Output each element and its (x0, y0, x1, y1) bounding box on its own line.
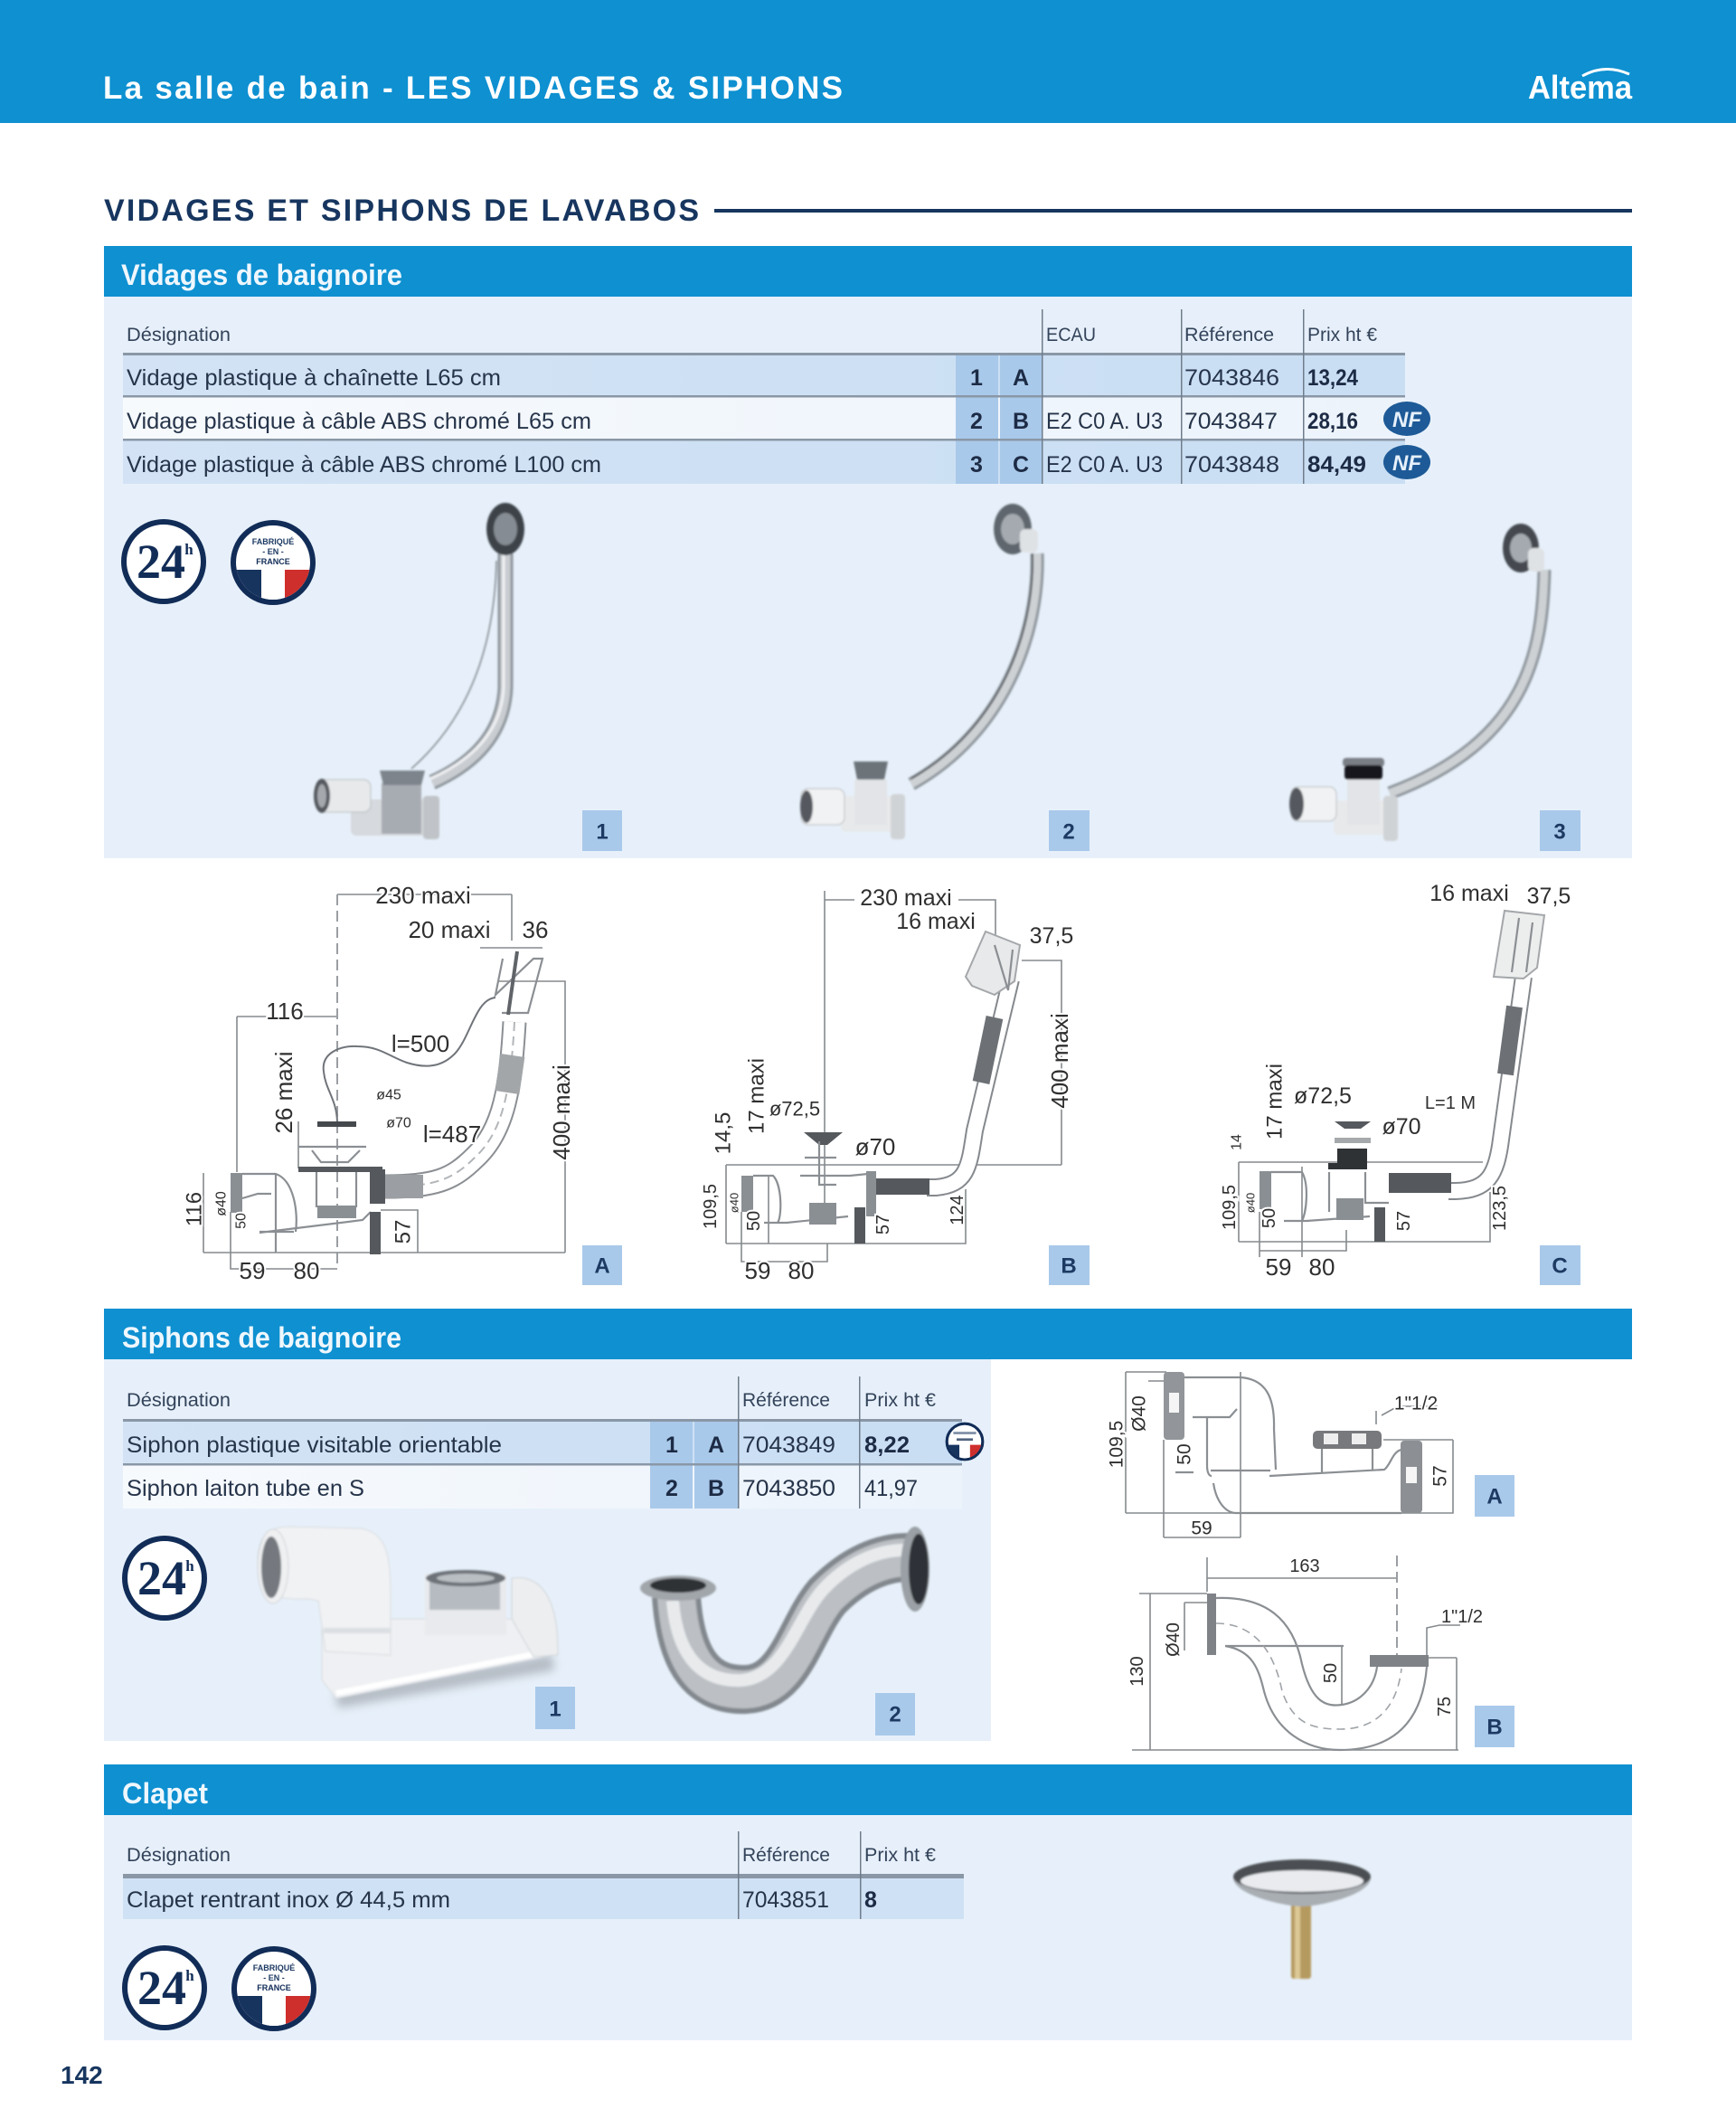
label 2 (1049, 810, 1090, 851)
dimensions siphon B: 1"1/2 (1441, 1607, 1483, 1627)
dimensions siphon B: 130 (1127, 1656, 1147, 1687)
icon: 24h delivery (125, 1948, 204, 2028)
table: siphons: Prix ht € (864, 1390, 936, 1411)
icon: NF mark: NF (1392, 408, 1422, 432)
table: siphons: B (708, 1476, 724, 1501)
dimensions C: L=1 M (1425, 1093, 1476, 1113)
label B (1475, 1706, 1514, 1747)
icon: 24h delivery: h (185, 1557, 194, 1575)
label A: A (594, 1253, 610, 1279)
label 3: 3 (1553, 819, 1566, 845)
table: clapet: Clapet rentrant inox Ø 44,5 mm (127, 1887, 450, 1913)
table: siphons: 7043849 (742, 1433, 835, 1458)
dimensions A: l=487 (423, 1121, 481, 1148)
product photo 2: vidage à câble L65 (800, 504, 1038, 839)
label C (1540, 1245, 1580, 1285)
table: vidages: 7043846 (1184, 365, 1279, 391)
icon: 24h delivery: 24 (137, 1551, 186, 1605)
product photo 3: vidage à câble L100 (1289, 524, 1544, 841)
label B (1049, 1245, 1090, 1285)
dimensions siphon B: 75 (1435, 1697, 1455, 1717)
dimensions siphon A: 1"1/2 (1394, 1393, 1438, 1414)
table: vidages: Vidage plastique à câble ABS chromé L65 cm (127, 409, 591, 434)
dimensions siphon B: 163 (1289, 1556, 1320, 1576)
dimensions A: ø40 (213, 1191, 230, 1216)
table: vidages: C (1013, 452, 1029, 478)
icon: fabriqué en France: - EN - (263, 1973, 285, 1982)
panel: siphons de baignoire (104, 1309, 1632, 1741)
dimensions siphon A: 57 (1430, 1465, 1450, 1487)
table: siphons: Siphon plastique visitable orientable (127, 1433, 502, 1458)
icon: small fabriqué en France (947, 1423, 983, 1460)
table: vidages: Vidage plastique à chaînette L65 cm (127, 365, 501, 391)
label C: C (1552, 1253, 1568, 1279)
icon: 24h delivery: 24 (137, 534, 185, 589)
technical drawing C (1220, 881, 1580, 1285)
panel heading: Vidages de baignoire (121, 259, 402, 291)
dimensions A: 57 (391, 1220, 416, 1244)
panel heading: Clapet (122, 1777, 208, 1810)
dimensions A: 36 (523, 916, 548, 943)
icon: fabriqué en France: FRANCE (257, 1983, 291, 1992)
dimensions B: ø40 (727, 1193, 741, 1213)
table: clapet: 7043851 (742, 1887, 829, 1913)
dimensions siphon A: 59 (1191, 1518, 1212, 1539)
product photo: siphon plastique (258, 1527, 558, 1700)
dimensions B: 16 maxi (896, 909, 976, 934)
table: siphons: 7043850 (742, 1476, 835, 1501)
panel: clapet (104, 1764, 1632, 2040)
product photo 1: vidage à chaînette (314, 503, 524, 839)
dimensions siphon A (1107, 1393, 1450, 1539)
page number: 142 (61, 2061, 103, 2089)
label A: A (1486, 1485, 1503, 1509)
table: siphons: Référence (742, 1390, 830, 1411)
dimensions B: 400 maxi (1046, 1013, 1073, 1109)
table: siphons: Désignation (127, 1390, 231, 1411)
header title: La salle de bain - LES VIDAGES & SIPHONS (103, 71, 843, 106)
label B: B (1486, 1715, 1503, 1740)
icon: NF mark (1383, 402, 1430, 436)
table: vidages: ECAU (1046, 325, 1096, 345)
dimensions A (183, 882, 575, 1284)
label 2 (875, 1693, 915, 1736)
dimensions C: 57 (1394, 1211, 1414, 1231)
dimensions siphon B (1127, 1556, 1483, 1717)
dimensions B: 50 (744, 1211, 764, 1231)
table: vidages (123, 309, 1430, 484)
label 2: 2 (889, 1702, 901, 1727)
table: siphons (123, 1376, 983, 1509)
label 1 (582, 810, 622, 851)
dimensions A: 116 (183, 1192, 206, 1226)
dimensions B: 17 maxi (745, 1058, 769, 1134)
section heading (104, 194, 1632, 228)
table: clapet: 8 (864, 1887, 877, 1913)
table: vidages: 28,16 (1307, 409, 1358, 434)
table: vidages: 1 (970, 365, 983, 391)
table: vidages: Vidage plastique à câble ABS chromé L100 cm (127, 452, 601, 478)
dimensions B: 80 (788, 1257, 814, 1284)
technical drawing siphon B (1127, 1556, 1514, 1750)
label 1: 1 (596, 819, 609, 845)
table: vidages: 13,24 (1307, 365, 1358, 391)
dimensions C: 59 (1266, 1253, 1291, 1281)
icon: 24h delivery: 24 (137, 1961, 186, 2015)
dimensions B: ø70 (855, 1133, 895, 1160)
label 3 (1540, 810, 1580, 851)
dimensions A: 80 (294, 1257, 319, 1284)
dimensions siphon B: 50 (1321, 1663, 1341, 1683)
table: clapet (123, 1831, 964, 1919)
label B: B (1061, 1253, 1077, 1279)
technical drawing siphon A (1107, 1372, 1514, 1539)
table: vidages: A (1013, 365, 1029, 391)
dimensions C: 14 (1230, 1134, 1244, 1150)
label 1: 1 (549, 1697, 561, 1722)
table: siphons: Siphon laiton tube en S (127, 1476, 364, 1501)
dimensions C: 123,5 (1490, 1186, 1510, 1231)
table: siphons: 41,97 (864, 1476, 918, 1501)
dimensions C: 16 maxi (1429, 881, 1509, 906)
label A (1475, 1475, 1514, 1517)
dimensions siphon A: 109,5 (1107, 1421, 1127, 1468)
icon: 24h delivery: h (184, 541, 193, 558)
dimensions C (1220, 881, 1571, 1281)
dimensions A: 400 maxi (548, 1064, 575, 1160)
icon: fabriqué en France: - EN - (262, 547, 284, 556)
label A (582, 1245, 622, 1285)
label 2: 2 (1062, 819, 1075, 845)
dimensions C: ø72,5 (1294, 1083, 1352, 1109)
icon: fabriqué en France (234, 1949, 314, 2029)
dimensions C: 17 maxi (1262, 1064, 1288, 1140)
dimensions C: ø70 (1382, 1114, 1421, 1140)
icon: 24h delivery (124, 522, 203, 601)
dimensions siphon A: 50 (1174, 1443, 1195, 1465)
table: vidages: 3 (970, 452, 983, 478)
table: siphons: 8,22 (864, 1433, 910, 1458)
dimensions B: 124 (948, 1195, 967, 1225)
icon: fabriqué en France: FABRIQUÉ (253, 1963, 295, 1972)
dimensions C: 37,5 (1527, 884, 1571, 909)
icon: NF mark (1383, 445, 1430, 479)
logo: Altema: Altema (1528, 69, 1633, 106)
icon: fabriqué en France: FABRIQUÉ (252, 537, 294, 546)
dimensions B: 59 (745, 1257, 770, 1284)
table: clapet: Prix ht € (864, 1845, 936, 1866)
dimensions siphon B: Ø40 (1164, 1622, 1184, 1657)
dimensions B: 109,5 (701, 1184, 721, 1229)
icon: fabriqué en France (233, 523, 313, 602)
table: vidages: E2 C0 A. U3 (1046, 409, 1163, 434)
dimensions A: 50 (233, 1213, 250, 1229)
table: vidages: 7043848 (1184, 452, 1279, 478)
dimensions B: 230 maxi (860, 885, 952, 911)
table: vidages: Prix ht € (1307, 325, 1377, 345)
dimensions A: 116 (266, 998, 304, 1025)
table: vidages: 84,49 (1307, 452, 1366, 478)
dimensions siphon A: Ø40 (1128, 1395, 1150, 1432)
technical drawing A (183, 882, 622, 1285)
icon: NF mark: NF (1392, 451, 1422, 476)
table: vidages: B (1013, 409, 1029, 434)
panel: vidages de baignoire (104, 246, 1632, 858)
table: clapet: Référence (742, 1845, 830, 1866)
icon: 24h delivery: h (185, 1967, 194, 1984)
header band (0, 0, 1736, 123)
dimensions A: ø70 (386, 1116, 411, 1130)
dimensions C: 80 (1309, 1253, 1335, 1281)
section heading: VIDAGES ET SIPHONS DE LAVABOS (104, 194, 699, 228)
dimensions A: l=500 (392, 1030, 449, 1057)
dimensions A: 230 maxi (375, 882, 471, 909)
dimensions B (701, 885, 1073, 1284)
dimensions A: 59 (240, 1257, 265, 1284)
table: vidages: Désignation (127, 325, 231, 345)
table: siphons: A (708, 1433, 724, 1458)
product photo: siphon laiton en S (640, 1527, 929, 1689)
dimensions A: ø45 (376, 1087, 401, 1103)
technical drawing B (701, 885, 1090, 1285)
dimensions A: 26 maxi (270, 1051, 297, 1134)
icon: 24h delivery (125, 1538, 204, 1618)
table: vidages: E2 C0 A. U3 (1046, 452, 1163, 478)
table: siphons: 2 (665, 1476, 678, 1501)
dimensions C: 109,5 (1220, 1185, 1240, 1230)
table: siphons: 1 (665, 1433, 678, 1458)
label 1 (535, 1687, 575, 1729)
dimensions B: 37,5 (1030, 923, 1073, 949)
table: vidages: 7043847 (1184, 409, 1278, 434)
icon: fabriqué en France: FRANCE (256, 557, 290, 566)
table: clapet: Désignation (127, 1845, 231, 1866)
dimensions C: 50 (1260, 1208, 1279, 1228)
product photo: clapet (1233, 1859, 1371, 1979)
dimensions B: 14,5 (711, 1112, 736, 1154)
dimensions A: 20 maxi (408, 916, 491, 943)
dimensions B: 57 (873, 1215, 893, 1234)
panel heading: Siphons de baignoire (122, 1321, 401, 1354)
table: vidages: 2 (970, 409, 983, 434)
dimensions C: ø40 (1244, 1193, 1257, 1213)
table: vidages: Référence (1184, 325, 1274, 345)
dimensions B: ø72,5 (769, 1098, 820, 1120)
